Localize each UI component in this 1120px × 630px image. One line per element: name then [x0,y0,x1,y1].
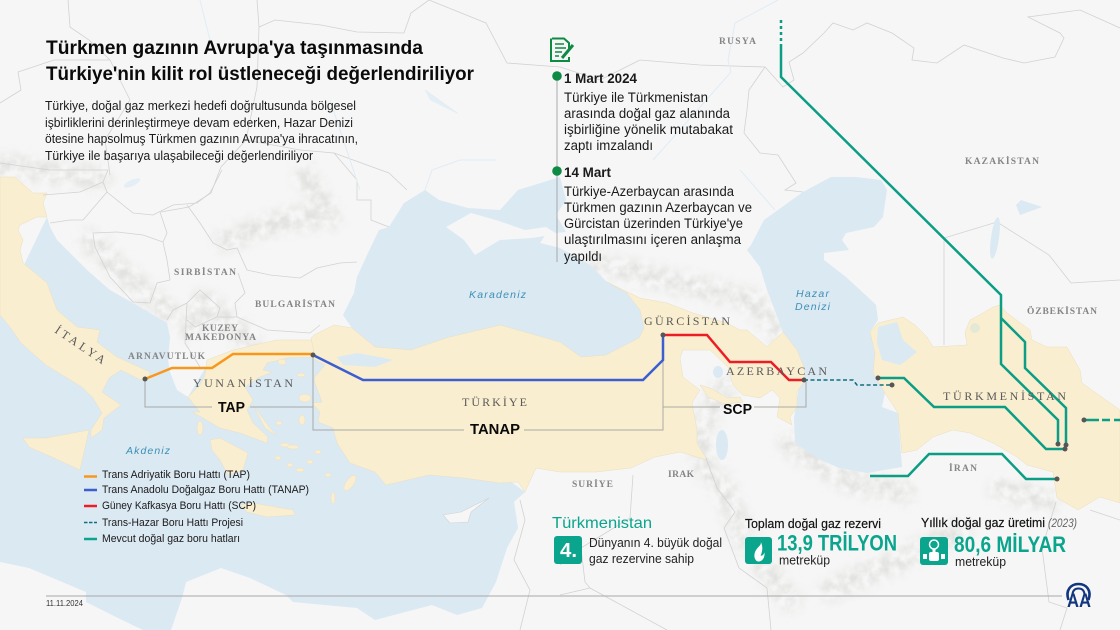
pipeline: TANAP [310,335,663,380]
country labels: TÜRKMENİSTAN [943,389,1066,403]
land: Sicily [23,430,89,470]
country labels: IRAK [668,470,695,480]
country labels: AZERBAYCAN [726,364,827,378]
Caspian Sea [747,177,902,473]
label: SCP: SCP [723,401,752,418]
stat: annual gas production: Yıllık doğal gaz üretimi [921,515,1045,530]
stat: annual gas production [920,515,1077,569]
timeline: Türkiye-Azerbaycan arasında [564,184,734,199]
intro text: Türkiye, doğal gaz merkezi hedefi doğrultusunda bölgesel [45,99,356,113]
country labels: YUNANİSTAN [193,376,293,390]
stat: total gas reserve [745,516,897,568]
intro text: işbirliklerini derinleştirmeye devam ederken, Hazar Denizi [45,116,353,130]
legend: Mevcut doğal gaz boru hatları [102,533,240,545]
label: TAP: TAP [218,399,245,416]
stat: Turkmenistan rank: Dünyanın 4. büyük doğal [589,536,722,550]
Nakhchivan strip [700,385,743,404]
country labels: İRAN [949,462,977,474]
intro text: Türkiye ile başarıya ulaşabileceği değerlendiriliyor [45,149,313,163]
land: Turkmenistan [870,305,1120,510]
date: 11.11.2024 [46,598,83,608]
timeline [552,71,752,264]
country labels: MAKEDONYA [185,333,256,343]
stat: Turkmenistan rank: gaz rezervine sahip [589,552,694,566]
Crimea [446,213,557,255]
pipeline: Trans-Caspian project [804,380,894,388]
country labels: KAZAKİSTAN [965,155,1039,167]
pipeline: TAP [142,354,313,382]
country labels: SIRBİSTAN [174,266,236,278]
timeline: 14 Mart [564,165,611,180]
sea labels: Karadeniz [469,289,527,301]
legend: Trans Anadolu Doğalgaz Boru Hattı (TANAP) [102,484,309,496]
mountain shading [0,165,1050,600]
country labels: GÜRCİSTAN [644,314,730,328]
Black Sea [343,177,645,370]
timeline: Türkiye ile Türkmenistan [564,90,708,105]
timeline: zaptı imzalandı [564,138,653,153]
logo: Anadolu Agency: AA [1067,591,1091,612]
legend [84,469,309,545]
legend: Trans-Hazar Boru Hattı Projesi [102,517,243,529]
timeline: işbirliğine yönelik mutabakat [564,122,733,137]
stat: total gas reserve: metreküp [779,554,830,568]
country labels: ARNAVUTLUK [128,352,206,362]
Mediterranean sea [0,217,525,630]
country labels: ÖZBEKİSTAN [1027,304,1097,317]
title [46,37,474,85]
land: Türkiye, Georgia and Azerbaijan [311,282,805,492]
country labels: RUSYA [719,37,756,47]
stat: total gas reserve: Toplam doğal gaz rezervi [745,516,881,531]
pipeline: SCP [660,332,806,382]
Kara-Bogaz lagoon [877,322,917,365]
country labels: BULGARİSTAN [255,298,335,310]
timeline: yapıldı [564,249,602,264]
country labels: TÜRKİYE [462,395,527,409]
timeline: ulaştırılmasını içeren anlaşma [564,232,741,247]
pipeline callout brackets [145,335,806,430]
country labels: İTALYA [52,323,109,367]
label: TANAP: TANAP [470,421,520,438]
stat: annual gas production: 80,6 MİLYAR [954,532,1066,557]
stat: Turkmenistan rank: Türkmenistan [552,515,652,532]
Sea of Marmara [337,353,393,367]
title: Türkmen gazının Avrupa'ya taşınmasında [46,37,423,59]
intro text: ötesine hapsolmuş Türkmen gazının Avrupa'ya ihracatının, [45,132,358,146]
stat: annual gas production: (2023) [1048,518,1077,530]
country labels: KUZEY [202,324,238,334]
icon: gas valve [923,540,945,561]
timeline: Türkmen gazının Azerbaycan ve [564,200,752,215]
intro text [45,99,358,163]
logo: Anadolu Agency [1067,584,1091,612]
land: Greece [188,340,358,517]
footer rule [46,595,1062,597]
timeline: 1 Mart 2024 [564,71,637,86]
sea labels: Denizi [795,301,831,313]
pipeline: existing gas lines [781,20,1120,482]
stat: Turkmenistan rank [552,515,722,566]
legend: Trans Adriyatik Boru Hattı (TAP) [102,469,250,481]
land: Italy [0,177,150,438]
sea labels [125,288,831,457]
rivers and lakes [123,0,1042,460]
sea labels: Akdeniz [125,445,171,457]
stat: total gas reserve: 13,9 TRİLYON [777,530,897,556]
title: Türkiye'nin kilit rol üstleneceği değerlendiriliyor [46,63,474,85]
country labels [52,37,1097,490]
icon: flame [754,540,765,562]
stat: Turkmenistan rank: 4. [560,540,577,562]
legend: Güney Kafkasya Boru Hattı (SCP) [102,500,256,512]
country labels: SURİYE [572,478,613,490]
icon: document with pen [551,38,573,61]
land: Cyprus [443,498,489,523]
timeline: arasında doğal gaz alanında [564,106,730,121]
stat: annual gas production: metreküp [955,555,1006,569]
sea labels: Hazar [796,288,830,300]
timeline: Gürcistan üzerinden Türkiye'ye [564,216,743,231]
